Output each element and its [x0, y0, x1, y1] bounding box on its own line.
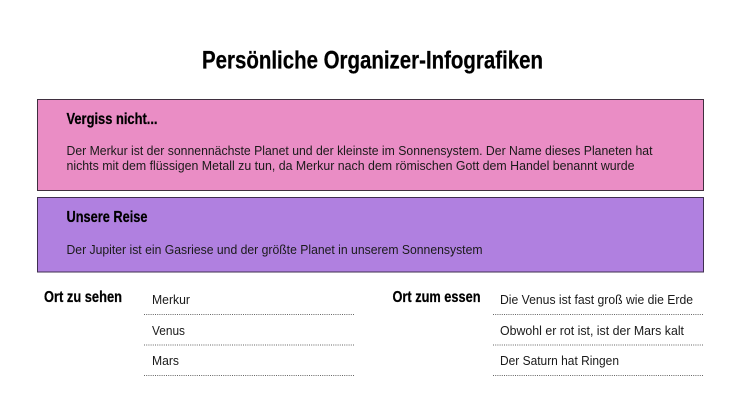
list item: Mars: Mars: [152, 353, 179, 368]
panel: Unsere Reise: [38, 198, 704, 272]
list item: Saturn fact: Der Saturn hat Ringen: [500, 353, 619, 368]
list item: Mars fact: Obwohl er rot ist, ist der Mars kalt: [500, 323, 684, 338]
heading: Vergiss nicht: Vergiss nicht...: [66, 111, 158, 128]
list: places to eat: [493, 292, 703, 376]
text block: Jupiter description: Der Jupiter ist ein Gasriese und der größte Planet in unserem Sonnensystem: [66, 242, 482, 257]
list: places to see: [144, 292, 354, 376]
heading: Unsere Reise: Unsere Reise: [66, 209, 148, 226]
panel: Vergiss nicht: [38, 100, 704, 190]
heading: Ort zum essen: Ort zum essen: [392, 289, 480, 306]
heading: Ort zu sehen: Ort zu sehen: [44, 289, 122, 306]
list item: Venus: Venus: [152, 323, 185, 338]
text block: Merkur description: Der Merkur ist der sonnennächste Planet und der kleinste im Sonnensystem. Der Name dieses Planeten hat: [66, 143, 653, 158]
list item: Venus fact: Die Venus ist fast groß wie die Erde: [500, 292, 693, 307]
text block: Merkur description: [66, 143, 653, 173]
title: Persönliche Organizer-Infografiken: [202, 46, 543, 74]
text block: Merkur description: nichts mit dem flüssigen Metall zu tun, da Merkur nach dem römischen Gott dem Handel benannt wurde: [66, 158, 634, 173]
list item: Merkur: Merkur: [152, 292, 191, 307]
